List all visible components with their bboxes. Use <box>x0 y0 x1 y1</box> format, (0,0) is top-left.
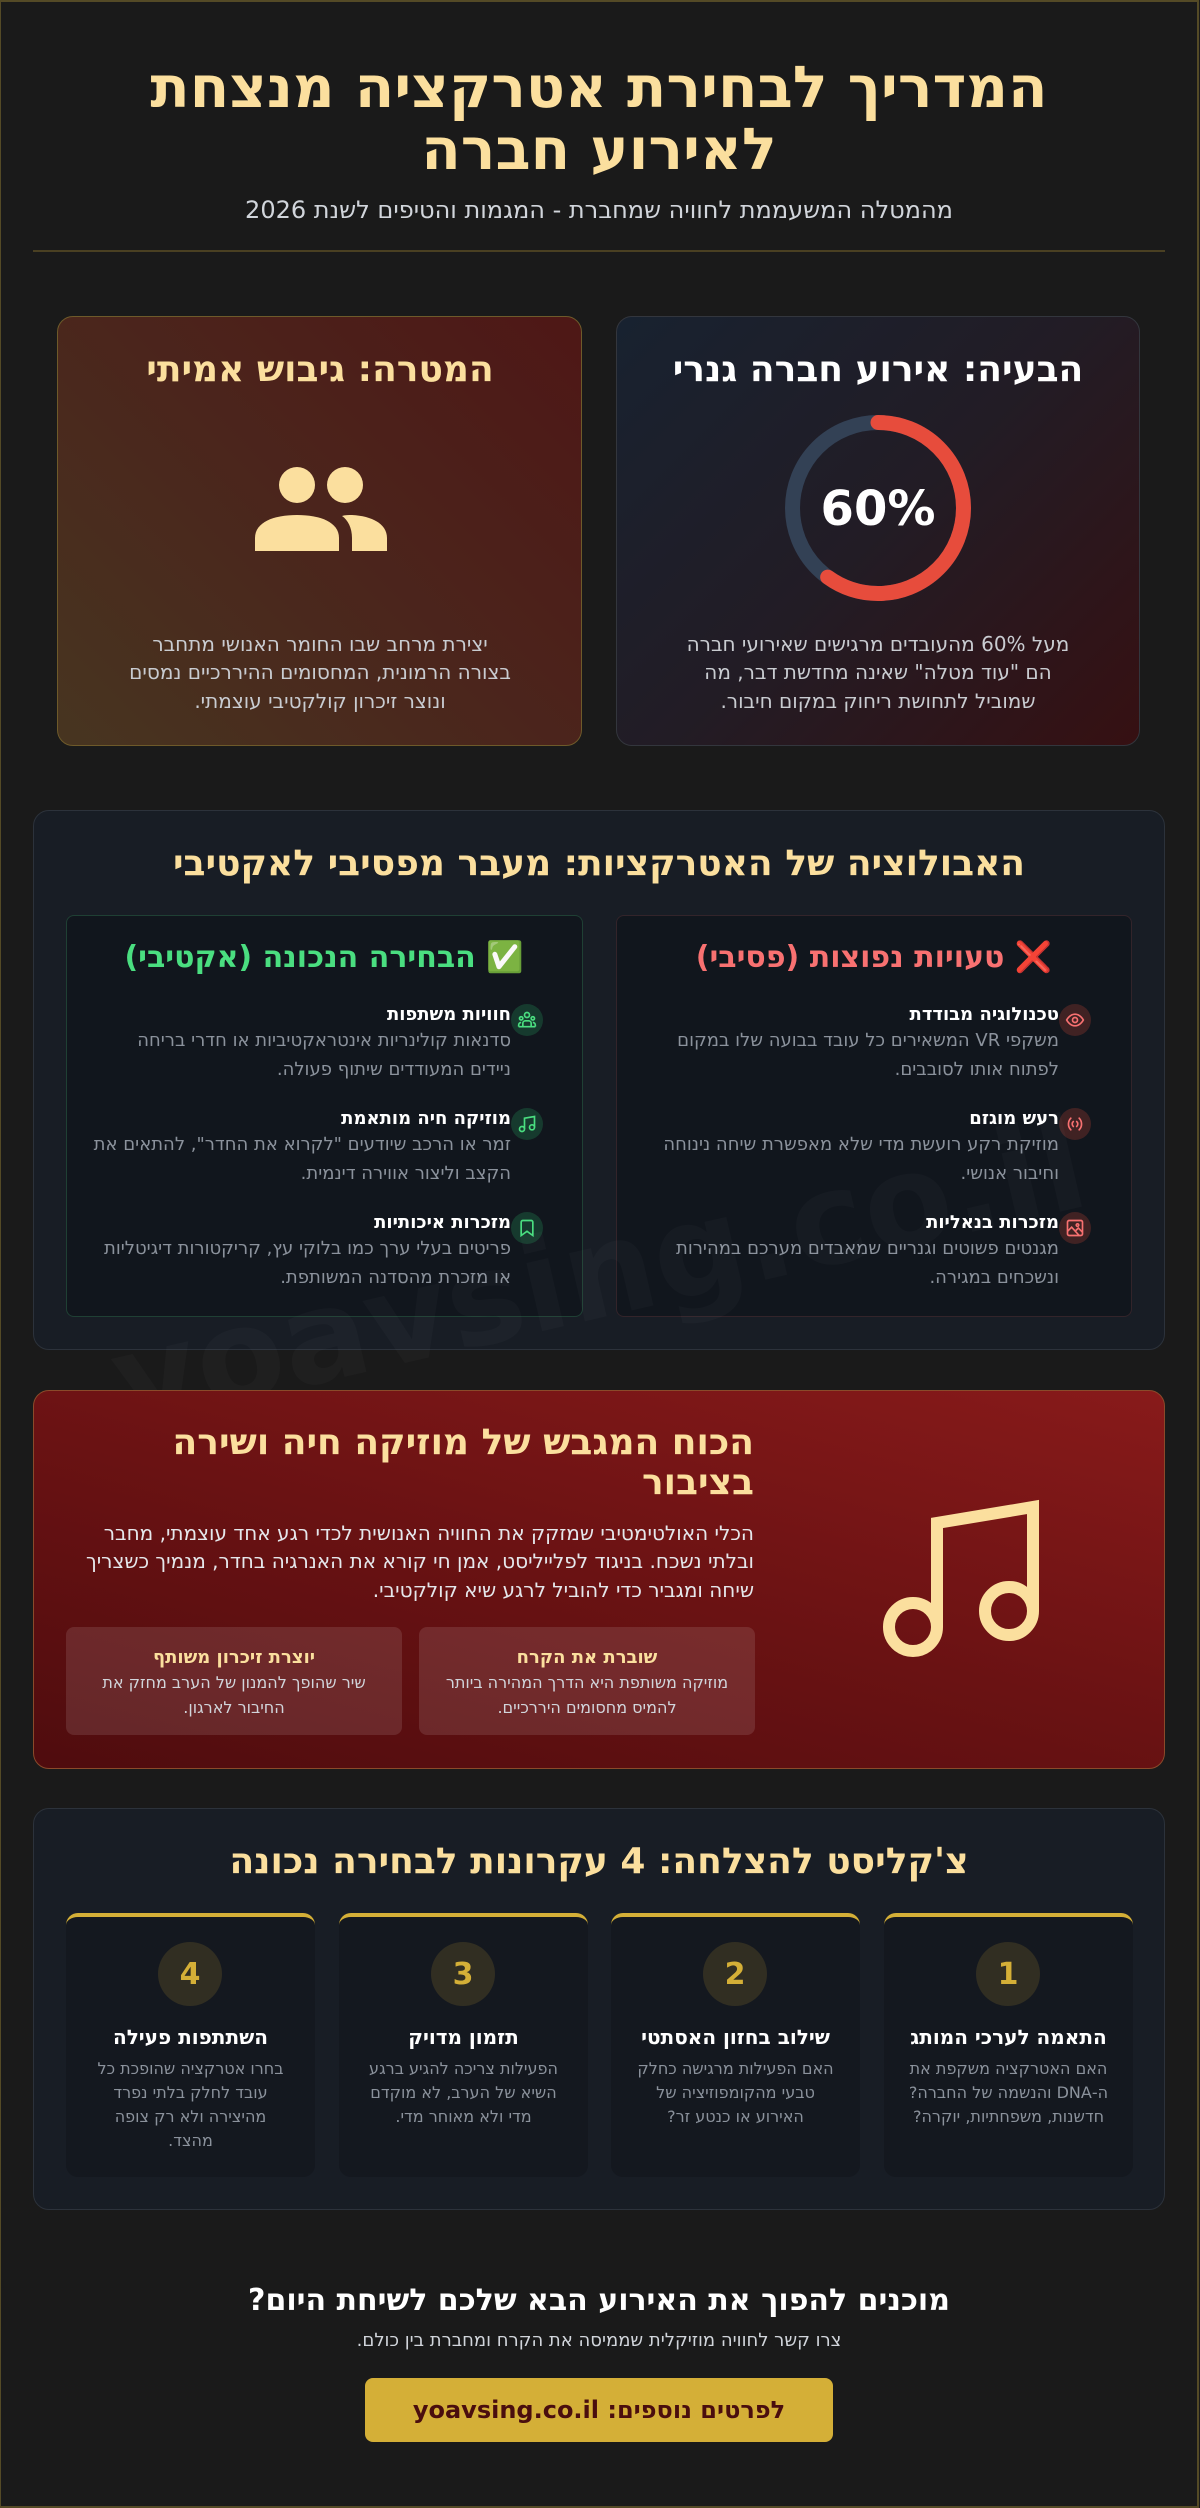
icon: large music note <box>883 1500 1039 1657</box>
text: live music: הכלי האולטימטיבי שמזקק את החוויה האנושית לכדי רגע אחד עוצמתי, מחבר <box>105 1521 755 1545</box>
item: quality souvenirs: פריטים בעלי ערך כמו בלוקי עץ, קריקטורות דיגיטליות <box>105 1238 512 1259</box>
heading: the goal: המטרה: גיבוש אמיתי <box>147 349 495 390</box>
card: step 1: חדשנות, משפחתיות, יוקרה? <box>914 2107 1105 2126</box>
card: step 4: בחרו אטרקציה שהופכת כל <box>98 2059 284 2078</box>
heading: live music: הכוח המגבש של מוזיקה חיה ושירה <box>174 1422 755 1463</box>
card: step 2: האירוע או כנטע זר? <box>668 2107 805 2126</box>
item: tailored live music: מוזיקה חיה מותאמת <box>342 1108 512 1129</box>
item: excessive noise: מוזיקת רקע רועשת מדי שלא מאפשרת שיחה נינוחה <box>664 1134 1060 1155</box>
panel: checklist section <box>34 1808 1166 2210</box>
card: step 4: מהיצירה ולא רק צופה <box>116 2107 267 2126</box>
item: isolating technology: משקפי VR המשאירים כל עובד בבועה שלו במקום <box>678 1030 1060 1051</box>
card: step 2: טבעי מהקומפוזיציה של <box>657 2083 816 2102</box>
icon: bookmark <box>512 1212 544 1244</box>
card: step 1 <box>885 1913 1134 2177</box>
item: banal souvenirs <box>676 1212 1060 1288</box>
button: website <box>366 2378 834 2442</box>
item: banal souvenirs: ונשכחים במגירה. <box>930 1267 1060 1288</box>
card: step 4: 4 <box>181 1956 201 1992</box>
text: live music: שיחה ומגביר כדי להוביל לרגע שיא קולקטיבי. <box>374 1578 755 1602</box>
text: the goal: יצירת מרחב שבו החומר האנושי מתחבר <box>153 632 489 656</box>
chart: 60 percent donut <box>785 415 971 601</box>
panel: the problem <box>617 316 1141 746</box>
card: step 1: 1 <box>999 1956 1019 1992</box>
item: quality souvenirs: מזכרות איכותיות <box>375 1212 512 1233</box>
card: breaks the ice <box>420 1627 756 1735</box>
card: step 4 <box>67 1913 316 2177</box>
card: step 2: האם הפעילות מרגישה כחלק <box>638 2059 835 2078</box>
card: breaks the ice: להמיס מחסומים היררכיים. <box>498 1698 678 1716</box>
card: step 2: 2 <box>726 1956 746 1992</box>
text: live music: ובלתי נשכח. בניגוד לפלייליסט, אמן חי קורא את האנרגיה בחדר, מנמיך כשצריך <box>87 1549 755 1573</box>
item: tailored live music: הקצב וליצור אווירה דינמית. <box>302 1163 512 1184</box>
heading: passive mistakes: ❌ טעויות נפוצות (פסיבי) <box>697 940 1053 975</box>
card: step 3: הפעילות צריכה להגיע ברגע <box>370 2059 559 2078</box>
card: shared memory: שיר שהופך להמנון של הערב מחזק את <box>103 1673 367 1692</box>
panel: live music hero <box>34 1390 1166 1769</box>
item: banal souvenirs: מגנטים פשוטים וגנריים שמאבדים מערכם במהירות <box>677 1238 1060 1259</box>
panel: evolution section <box>34 810 1166 1350</box>
item: isolating technology <box>678 1004 1060 1080</box>
card: step 4: עובד לחלק בלתי נפרד <box>114 2083 269 2102</box>
subtitle: מהמטלה המשעממת לחוויה שמחברת - המגמות והטיפים לשנת 2026 <box>246 196 954 224</box>
text: the problem: מעל 60% מהעובדים מרגישים שאירועי חברה <box>688 632 1070 656</box>
item: quality souvenirs: או מזכרת מהסדנה המשותפת. <box>281 1267 512 1288</box>
item: shared experiences: חוויות משתפות <box>388 1004 512 1025</box>
heading: the problem: הבעיה: אירוע חברה גנרי <box>674 349 1084 390</box>
panel: right choice <box>67 915 584 1317</box>
card: step 3: 3 <box>454 1956 474 1992</box>
card: breaks the ice: מוזיקה משותפת היא הדרך המהירה ביותר <box>447 1673 729 1692</box>
panel: the goal <box>58 316 583 746</box>
item: excessive noise <box>664 1108 1060 1184</box>
watermark: yoavsing.co.il <box>99 1089 1100 1458</box>
card: step 3: השיא של הערב, לא מוקדם <box>371 2083 558 2102</box>
card: step 3: מדי ולא מאוחר מדי. <box>396 2107 533 2126</box>
icon: picture <box>1060 1212 1092 1244</box>
icon: eye <box>1060 1004 1092 1036</box>
text: the problem <box>688 632 1070 713</box>
item: isolating technology: לפתוח אותו לסובבים. <box>896 1059 1060 1080</box>
text: the goal: ונוצר זיכרון קולקטיבי עוצמתי. <box>195 689 447 713</box>
item: shared experiences: ניידים המעודדים שיתוף פעולה. <box>278 1059 512 1080</box>
heading: live music <box>174 1422 755 1503</box>
text: call to action: צרו קשר לחוויה מוזיקלית שממיסה את הקרח ומחברת בין כולם. <box>358 2330 842 2351</box>
card: step 3 <box>340 1913 589 2177</box>
card: shared memory: החיבור לארגון. <box>184 1698 286 1716</box>
item: excessive noise: וחיבור אנושי. <box>961 1163 1060 1184</box>
button: website: לפרטים נוספים: yoavsing.co.il <box>414 2396 786 2424</box>
item: tailored live music <box>94 1108 512 1184</box>
card: step 4: מהצד. <box>169 2131 214 2150</box>
icon: group <box>512 1004 544 1036</box>
item: shared experiences <box>138 1004 512 1080</box>
card: step 2 <box>612 1913 861 2177</box>
heading: call to action: מוכנים להפוך את האירוע הבא שלכם לשיחת היום? <box>249 2283 951 2318</box>
item: tailored live music: זמר או הרכב שיודעים "לקרוא את החדר", להתאים את <box>95 1134 512 1155</box>
text: the goal <box>130 632 512 713</box>
heading: checklist: צ'קליסט להצלחה: 4 עקרונות לבחירה נכונה <box>230 1841 970 1882</box>
heading: evolution: האבולוציה של האטרקציות: מעבר מפסיבי לאקטיבי <box>174 843 1026 884</box>
card: shared memory <box>67 1627 403 1735</box>
card: step 1: האם האטרקציה משקפת את <box>911 2059 1108 2078</box>
card: step 1: ה-DNA והנשמה של החברה? <box>910 2083 1109 2102</box>
item: banal souvenirs: מזכרות בנאליות <box>927 1212 1060 1233</box>
item: shared experiences: סדנאות קולינריות אינטראקטיביות או חדרי בריחה <box>138 1030 512 1051</box>
chart: 60 percent donut: 60% <box>822 481 936 537</box>
panel: passive mistakes <box>617 915 1133 1317</box>
text: the problem: שמוביל לתחושת ריחוק במקום חיבור. <box>721 689 1037 713</box>
title: המדריך לבחירת אטרקציה מנצחת <box>151 54 1049 121</box>
card: step 3: תזמון מדויק <box>409 2025 520 2049</box>
heading: right choice: ✅ הבחירה הנכונה (אקטיבי) <box>125 940 525 975</box>
text: live music <box>86 1521 755 1602</box>
item: excessive noise: רעש מוגזם <box>970 1108 1060 1129</box>
heading: live music: בציבור <box>643 1462 755 1503</box>
card: step 1: התאמה לערכי המותג <box>911 2025 1108 2049</box>
title: לאירוע חברה <box>422 116 778 183</box>
item: isolating technology: טכנולוגיה מבודדת <box>911 1004 1060 1025</box>
card: breaks the ice: שוברת את הקרח <box>518 1647 658 1668</box>
item: quality souvenirs <box>104 1212 512 1288</box>
text: the problem: הם "עוד מטלה" שאינה מחדשת דבר, מה <box>705 660 1053 684</box>
icon: noise <box>1060 1108 1092 1140</box>
title <box>150 54 1049 183</box>
card: shared memory: יוצרת זיכרון משותף <box>154 1647 316 1668</box>
icon: people <box>255 467 387 551</box>
text: the goal: בצורה הרמונית, המחסומים ההיררכיים נמסים <box>130 660 512 684</box>
icon: music note <box>512 1108 544 1140</box>
card: step 4: השתתפות פעילה <box>114 2025 269 2049</box>
card: step 2: שילוב בחזון האסתטי <box>642 2025 831 2049</box>
